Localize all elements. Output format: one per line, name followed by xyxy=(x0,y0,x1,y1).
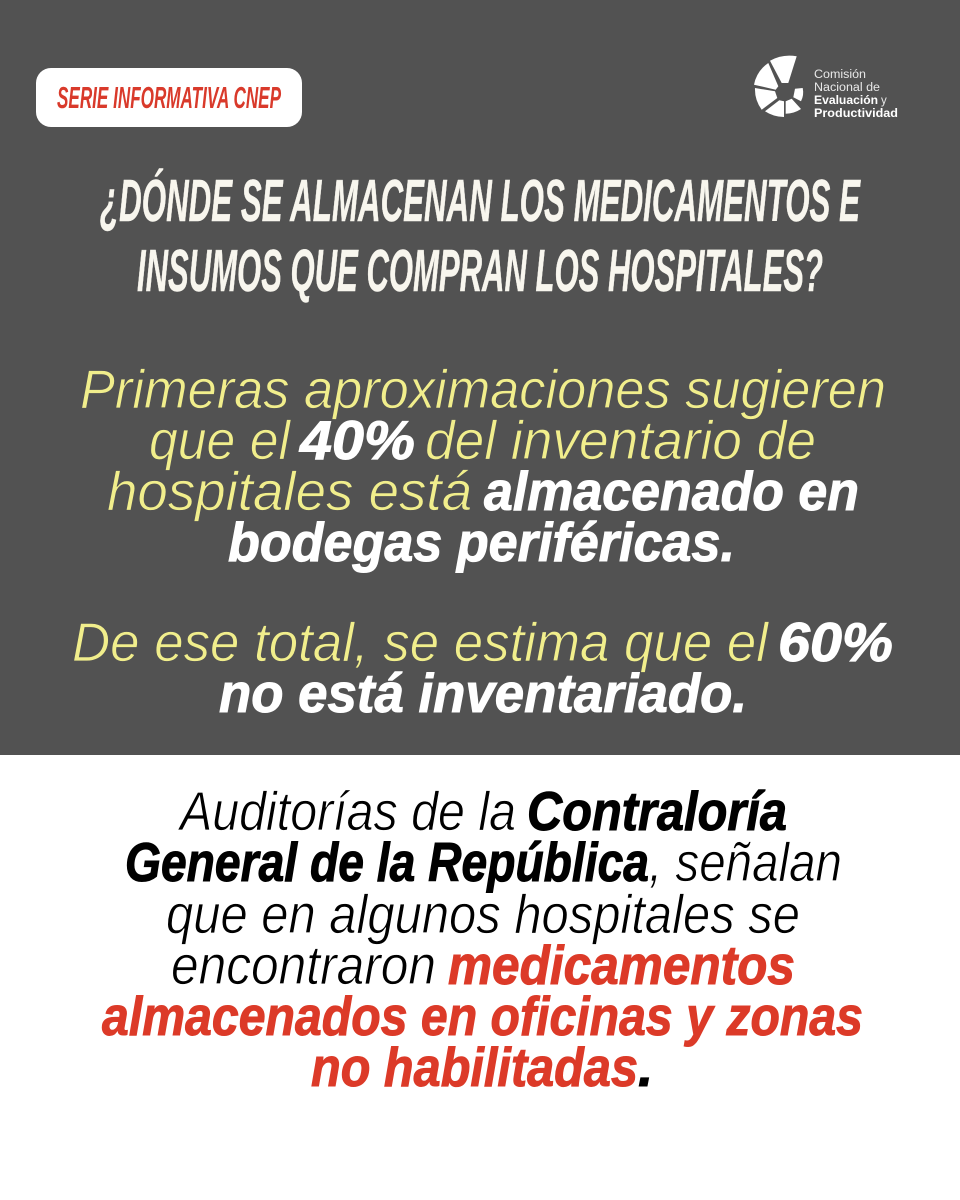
text block: 40% of inventory in peripheral warehouses: del inventario de xyxy=(425,409,816,471)
text block: 40% of inventory in peripheral warehouses xyxy=(80,358,886,573)
text: logo name: Comisión xyxy=(814,69,866,81)
text: logo name: Productividad xyxy=(814,108,898,120)
text block: 60% not inventoried xyxy=(72,611,893,724)
text block: Contraloría audits xyxy=(102,780,863,1098)
panel: dark upper background xyxy=(0,0,960,755)
text block: 40% of inventory in peripheral warehouses: almacenado en xyxy=(484,460,859,522)
text: logo name: Evaluación xyxy=(814,95,878,107)
text block: 40% of inventory in peripheral warehouses: bodegas periféricas. xyxy=(228,511,735,573)
badge: serie informativa xyxy=(36,68,302,127)
text block: Contraloría audits: Contraloría xyxy=(527,780,787,842)
icon: logo segmented circle xyxy=(754,56,803,117)
badge: serie informativa: SERIE INFORMATIVA CNEP xyxy=(57,80,281,115)
text block: Contraloría audits: medicamentos xyxy=(448,934,795,996)
text: logo name: y xyxy=(881,95,887,107)
text block: 40% of inventory in peripheral warehouses: Primeras aproximaciones sugieren xyxy=(80,358,886,420)
text block: Contraloría audits: no habilitadas xyxy=(311,1036,638,1098)
text block: 60% not inventoried: De ese total, se estima que el xyxy=(72,611,770,673)
logo: Comisión Nacional de Evaluación y Productividad xyxy=(754,56,898,120)
text: logo name xyxy=(814,69,898,120)
text block: Contraloría audits: , señalan xyxy=(649,831,842,893)
text block: 60% not inventoried: 60% xyxy=(778,611,893,673)
text block: Contraloría audits: . xyxy=(638,1036,653,1098)
text: logo name: Nacional de xyxy=(814,82,880,94)
text block: Contraloría audits: encontraron xyxy=(171,934,436,996)
text block: Contraloría audits: General de la República xyxy=(125,831,649,893)
text block: 40% of inventory in peripheral warehouses: 40% xyxy=(299,409,415,471)
text block: Contraloría audits: que en algunos hospitales se xyxy=(166,883,800,945)
title xyxy=(100,168,861,304)
panel: white lower background xyxy=(0,755,960,1200)
text block: Contraloría audits: Auditorías de la xyxy=(177,780,516,842)
text block: 40% of inventory in peripheral warehouses: que el xyxy=(149,409,292,471)
text block: 60% not inventoried: no está inventariado. xyxy=(219,662,747,724)
text block: Contraloría audits: almacenados en oficinas y zonas xyxy=(102,985,863,1047)
text block: 40% of inventory in peripheral warehouses: hospitales está xyxy=(107,460,472,522)
